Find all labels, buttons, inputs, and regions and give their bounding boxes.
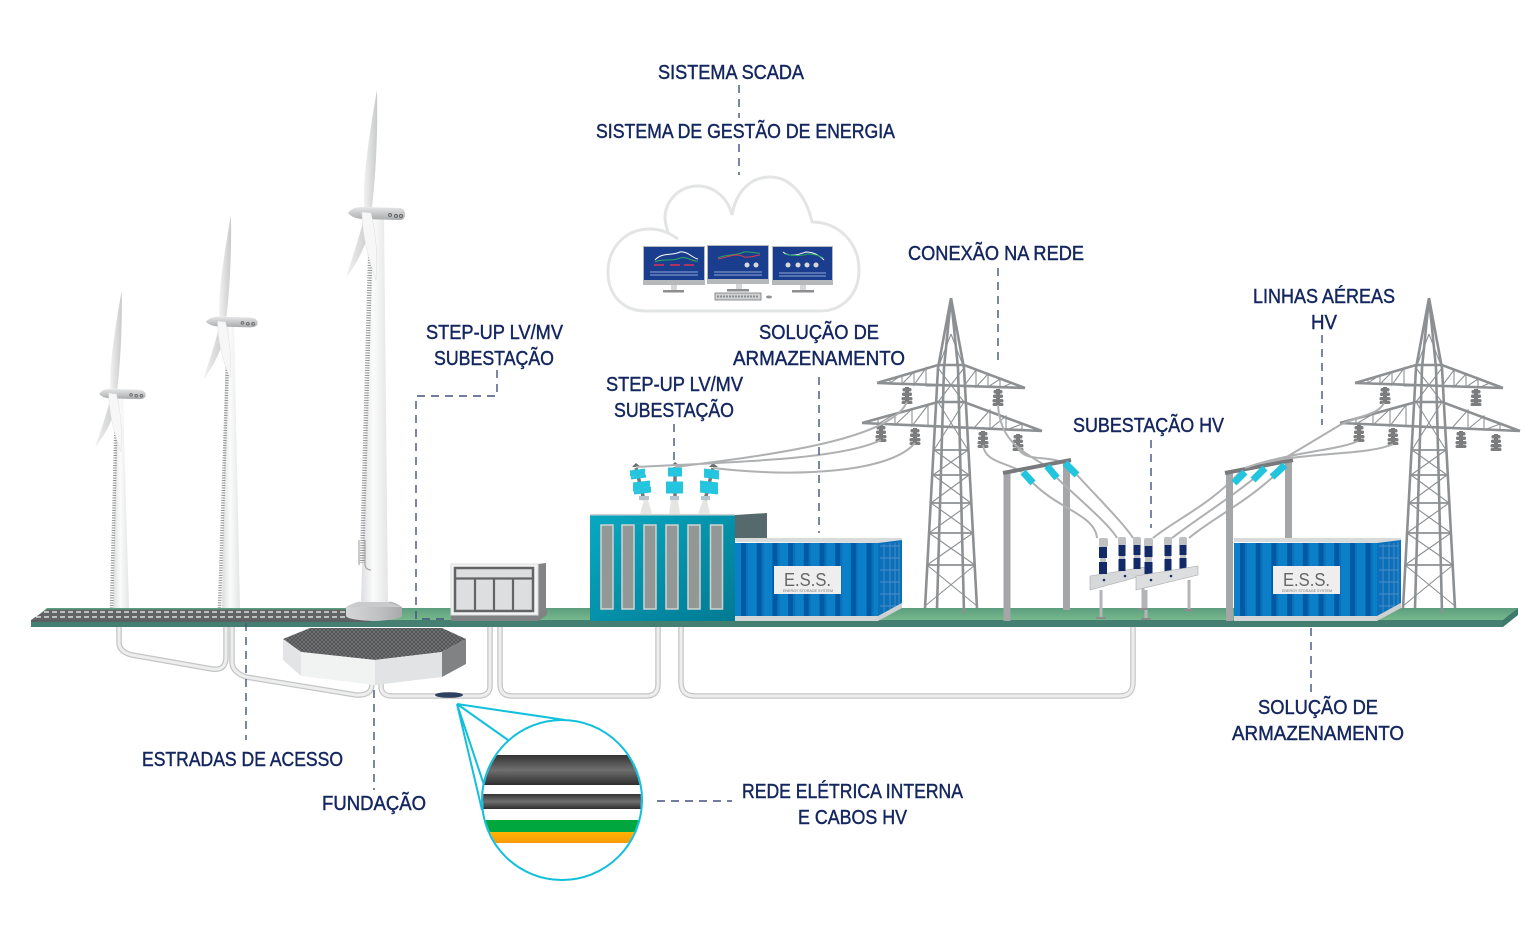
dashed leader lines	[246, 85, 1322, 801]
label: grid connection: CONEXÃO NA REDE	[908, 242, 1084, 265]
access road	[31, 610, 370, 622]
monitor right	[772, 246, 833, 292]
label: step-up substation (transformer)	[606, 373, 743, 422]
keyboard and mouse	[715, 293, 772, 300]
underground cables	[119, 625, 1133, 696]
label: step-up substation (cabinet)	[426, 321, 563, 370]
buried cable marker	[435, 692, 463, 698]
label: HV substation: SUBESTAÇÃO HV	[1073, 414, 1224, 437]
label: storage solution (top): ARMAZENAMENTO	[733, 347, 905, 370]
step-up transformer	[590, 462, 767, 621]
cloud with SCADA monitors	[608, 177, 859, 311]
gantry 2 and wires	[1153, 403, 1393, 621]
monitor center	[707, 245, 769, 292]
foundation	[283, 628, 466, 685]
energy storage container 2	[1234, 538, 1401, 621]
label: internal grid and HV cables	[742, 780, 963, 829]
label: HV overhead lines: HV	[1311, 311, 1337, 334]
label: storage solution (bottom): SOLUÇÃO DE	[1258, 696, 1378, 719]
label: step-up substation (cabinet): SUBESTAÇÃO	[434, 347, 554, 370]
wires from transformer to tower 1	[636, 402, 915, 472]
label: step-up substation (cabinet): STEP-UP LV/MV	[426, 321, 563, 344]
transmission tower 2	[1340, 298, 1520, 613]
label: foundation: FUNDAÇÃO	[322, 792, 426, 815]
wind turbine 3	[346, 90, 405, 621]
label: step-up substation (transformer): STEP-UP LV/MV	[606, 373, 743, 396]
LV/MV substation cabinet	[451, 563, 547, 621]
monitor left	[643, 246, 705, 292]
label: internal grid and HV cables: REDE ELÉTRICA INTERNA	[742, 780, 963, 803]
label: internal grid and HV cables: E CABOS HV	[798, 806, 907, 829]
label: HV overhead lines	[1253, 285, 1395, 334]
cable cross-section callout	[457, 704, 645, 880]
transmission tower 1	[862, 298, 1042, 613]
energy storage container 2: ENERGY STORAGE SYSTEM	[1282, 588, 1332, 593]
label: storage solution (top): SOLUÇÃO DE	[759, 321, 879, 344]
ground platform	[31, 608, 1518, 627]
label: step-up substation (transformer): SUBESTAÇÃO	[614, 399, 734, 422]
energy storage container 1: E.S.S.	[784, 570, 831, 590]
label: HV overhead lines: LINHAS AÉREAS	[1253, 285, 1395, 308]
energy storage container 2: E.S.S.	[1283, 570, 1330, 590]
label: access roads: ESTRADAS DE ACESSO	[142, 748, 343, 771]
label: storage solution (top)	[733, 321, 905, 370]
label: storage solution (bottom): ARMAZENAMENTO	[1232, 722, 1404, 745]
wind turbine 1	[95, 291, 146, 608]
energy storage container 1: ENERGY STORAGE SYSTEM	[783, 588, 833, 593]
wind turbine 2	[203, 215, 258, 608]
HV substation switchgear	[1090, 537, 1198, 619]
gantry 1	[1003, 460, 1133, 621]
wires tower 1 to gantry	[983, 405, 1066, 472]
label: SISTEMA SCADA: SISTEMA SCADA	[658, 61, 804, 84]
energy storage container 1	[735, 538, 902, 621]
label: energy management system: SISTEMA DE GESTÃO DE ENERGIA	[596, 120, 895, 143]
label: storage solution (bottom)	[1232, 696, 1404, 745]
